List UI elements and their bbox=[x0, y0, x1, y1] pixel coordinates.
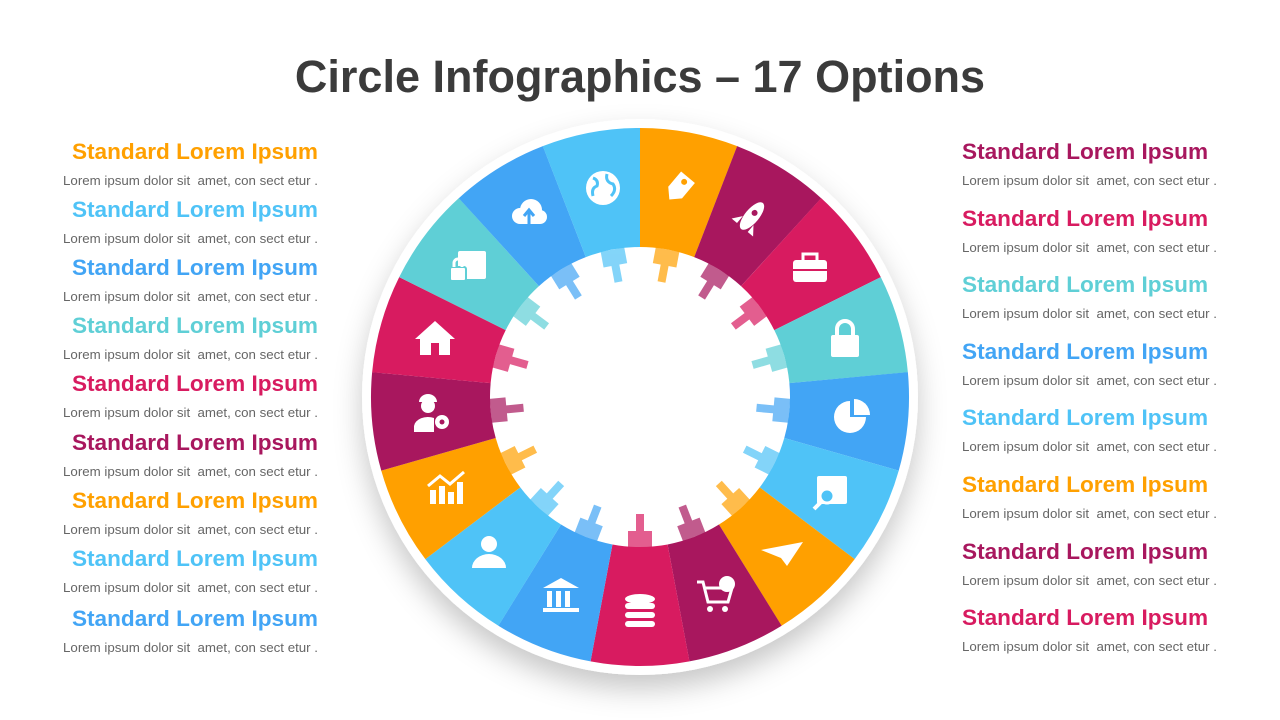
right item 1: Lorem ipsum dolor sit amet, con sect etur . bbox=[962, 173, 1217, 188]
left item 4: Standard Lorem Ipsum bbox=[72, 313, 318, 338]
right item 3 bbox=[962, 272, 1217, 321]
right item 6: Standard Lorem Ipsum bbox=[962, 472, 1208, 497]
left item 8 bbox=[63, 546, 318, 595]
right item 6 bbox=[962, 472, 1217, 521]
icon: cart bbox=[697, 576, 735, 612]
right item 5 bbox=[962, 405, 1217, 454]
icon: box lock bbox=[450, 251, 486, 281]
right item 1 bbox=[962, 139, 1217, 188]
left item 2: Lorem ipsum dolor sit amet, con sect etur . bbox=[63, 231, 318, 246]
icon: user bbox=[472, 536, 506, 568]
left item 9: Lorem ipsum dolor sit amet, con sect etur . bbox=[63, 640, 318, 655]
left item 2: Standard Lorem Ipsum bbox=[72, 197, 318, 222]
icon: worker bbox=[414, 394, 449, 432]
left item 9 bbox=[63, 606, 318, 655]
icon: cloud upload bbox=[512, 199, 547, 224]
left item 9: Standard Lorem Ipsum bbox=[72, 606, 318, 631]
left item 2 bbox=[63, 197, 318, 246]
right item 1: Standard Lorem Ipsum bbox=[962, 139, 1208, 164]
right item 2: Lorem ipsum dolor sit amet, con sect etur . bbox=[962, 240, 1217, 255]
left item 4 bbox=[63, 313, 318, 362]
right item 2: Standard Lorem Ipsum bbox=[962, 206, 1208, 231]
right item 8: Standard Lorem Ipsum bbox=[962, 605, 1208, 630]
right item 4 bbox=[962, 339, 1217, 388]
icon: growth chart bbox=[428, 472, 464, 504]
left item 6: Standard Lorem Ipsum bbox=[72, 430, 318, 455]
icon: bank bbox=[543, 578, 579, 612]
left item 3: Standard Lorem Ipsum bbox=[72, 255, 318, 280]
right item 7: Standard Lorem Ipsum bbox=[962, 539, 1208, 564]
right item 3: Lorem ipsum dolor sit amet, con sect etur . bbox=[962, 306, 1217, 321]
left item 3 bbox=[63, 255, 318, 304]
left column items: Standard Lorem Ipsum bbox=[72, 139, 318, 164]
icon: lock bbox=[831, 321, 859, 357]
left item 7 bbox=[63, 488, 318, 537]
left item 6: Lorem ipsum dolor sit amet, con sect etur . bbox=[63, 464, 318, 479]
icon: globe bbox=[586, 171, 620, 205]
left column items: Lorem ipsum dolor sit amet, con sect etur . bbox=[63, 173, 318, 188]
left item 5: Standard Lorem Ipsum bbox=[72, 371, 318, 396]
icon: paper plane bbox=[761, 542, 803, 566]
right item 8: Lorem ipsum dolor sit amet, con sect etur . bbox=[962, 639, 1217, 654]
right item 6: Lorem ipsum dolor sit amet, con sect etur . bbox=[962, 506, 1217, 521]
right item 4: Standard Lorem Ipsum bbox=[962, 339, 1208, 364]
left item 5: Lorem ipsum dolor sit amet, con sect etur . bbox=[63, 405, 318, 420]
left item 6 bbox=[63, 430, 318, 479]
left item 3: Lorem ipsum dolor sit amet, con sect etur . bbox=[63, 289, 318, 304]
right item 7 bbox=[962, 539, 1217, 588]
left item 7: Lorem ipsum dolor sit amet, con sect etur . bbox=[63, 522, 318, 537]
white ring background bbox=[362, 119, 918, 675]
left item 5 bbox=[63, 371, 318, 420]
icon: home bbox=[415, 321, 455, 355]
icon: pie chart bbox=[834, 399, 870, 433]
right item 2 bbox=[962, 206, 1217, 255]
icon: database bbox=[625, 594, 655, 627]
title: Circle Infographics – 17 Options bbox=[295, 51, 985, 102]
icon: tags bbox=[662, 171, 695, 205]
right item 3: Standard Lorem Ipsum bbox=[962, 272, 1208, 297]
segments bbox=[368, 123, 912, 666]
left column items bbox=[63, 139, 318, 188]
right item 8 bbox=[962, 605, 1217, 654]
icon: toolbox bbox=[793, 254, 827, 282]
right item 5: Lorem ipsum dolor sit amet, con sect etur . bbox=[962, 439, 1217, 454]
left item 8: Standard Lorem Ipsum bbox=[72, 546, 318, 571]
icon: rocket bbox=[730, 194, 774, 238]
left item 7: Standard Lorem Ipsum bbox=[72, 488, 318, 513]
right item 5: Standard Lorem Ipsum bbox=[962, 405, 1208, 430]
right item 4: Lorem ipsum dolor sit amet, con sect etur . bbox=[962, 373, 1217, 388]
icon: browser search bbox=[814, 476, 847, 509]
left item 4: Lorem ipsum dolor sit amet, con sect etur . bbox=[63, 347, 318, 362]
right item 7: Lorem ipsum dolor sit amet, con sect etur . bbox=[962, 573, 1217, 588]
left item 8: Lorem ipsum dolor sit amet, con sect etur . bbox=[63, 580, 318, 595]
